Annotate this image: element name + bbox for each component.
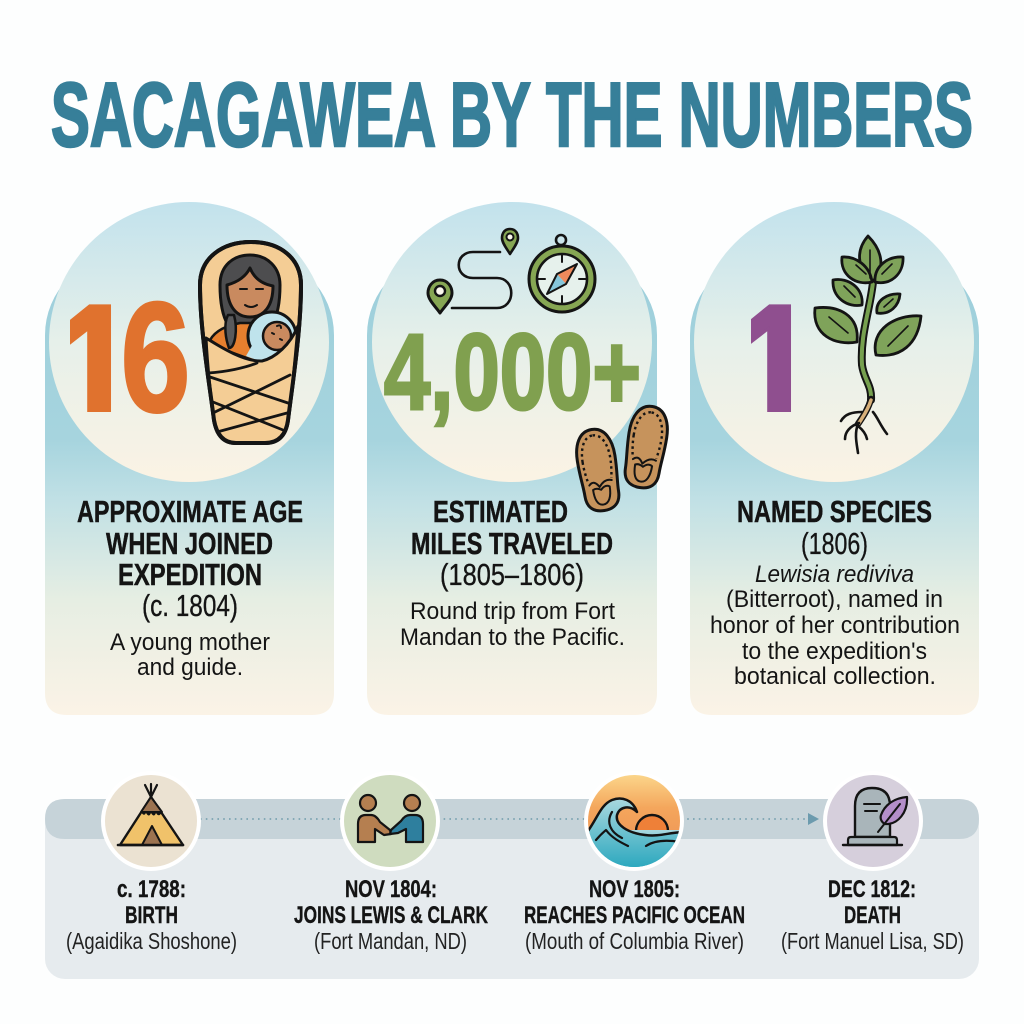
icon: compass: [529, 235, 595, 312]
text: joins Lewis and Clark: [294, 876, 488, 954]
stat number: 16: [70, 300, 187, 414]
description: bitterroot: [710, 561, 960, 690]
icon: bitterroot plant: [815, 236, 921, 453]
stat number: 16: 1: [52, 264, 139, 482]
milestone: reaches Pacific: [524, 771, 745, 954]
text: reaches Pacific: [524, 876, 745, 954]
heading: miles traveled: (1805–1806): [440, 557, 584, 592]
text: reaches Pacific: REACHES PACIFIC OCEAN: [524, 902, 745, 929]
timeline background: [45, 799, 979, 979]
panel: age card: [45, 202, 334, 715]
milestone: death: [781, 771, 964, 954]
milestone: joins Lewis and Clark: [294, 771, 488, 954]
description: young mother: and guide.: [137, 654, 243, 681]
panel: timeline: [45, 771, 979, 979]
description: bitterroot: honor of her contribution: [710, 612, 960, 639]
panel: miles card: [367, 202, 671, 715]
description: bitterroot: botanical collection.: [734, 663, 936, 690]
heading: miles traveled: [411, 494, 613, 592]
text: birth: c. 1788:: [117, 876, 186, 903]
stat circle: [372, 202, 652, 482]
card background: [367, 255, 657, 715]
text: death: DEATH: [844, 902, 901, 929]
heading: named species: NAMED SPECIES: [737, 494, 932, 529]
description: bitterroot: to the expedition's: [742, 638, 927, 665]
icon: tipi: [101, 771, 201, 871]
heading: approximate age: [77, 494, 303, 623]
heading: approximate age: WHEN JOINED: [106, 526, 273, 561]
description: bitterroot: Lewisia rediviva: [755, 561, 914, 588]
text: birth: (Agaidika Shoshone): [66, 928, 237, 954]
stat circle: [49, 202, 329, 482]
description: round trip: Round trip from Fort: [410, 598, 615, 625]
description: round trip: [400, 598, 625, 651]
heading: approximate age: APPROXIMATE AGE: [77, 494, 303, 529]
heading: approximate age: (c. 1804): [142, 588, 238, 623]
text: joins Lewis and Clark: JOINS LEWIS & CLARK: [294, 902, 488, 929]
icon: ocean wave and sunset: [584, 771, 685, 875]
text: joins Lewis and Clark: (Fort Mandan, ND): [314, 928, 467, 954]
text: birth: [66, 876, 237, 954]
stat circle: [694, 202, 974, 482]
heading: miles traveled: MILES TRAVELED: [411, 526, 613, 561]
timeline dotted arrow: [200, 813, 819, 825]
heading: named species: (1806): [801, 526, 868, 561]
timeline band: [45, 799, 979, 839]
description: round trip: Mandan to the Pacific.: [400, 624, 625, 651]
text: death: (Fort Manuel Lisa, SD): [781, 928, 964, 954]
description: bitterroot: (Bitterroot), named in: [726, 586, 943, 613]
heading: miles traveled: ESTIMATED: [433, 494, 568, 529]
text: death: [781, 876, 964, 954]
icon: mother and baby in cradleboard: [200, 242, 301, 443]
text: reaches Pacific: (Mouth of Columbia River): [525, 928, 744, 954]
text: joins Lewis and Clark: NOV 1804:: [345, 876, 437, 903]
icon: gravestone and feather: [823, 771, 923, 871]
stat number: 1: 1: [732, 264, 819, 482]
icon: moccasins: [573, 404, 671, 513]
heading: approximate age: EXPEDITION: [118, 557, 262, 592]
text: reaches Pacific: NOV 1805:: [589, 876, 680, 903]
description: young mother: [110, 629, 270, 681]
card background: [45, 255, 334, 715]
stat number: 4,000+: 4,000+: [384, 311, 641, 432]
panel: species card: [690, 202, 979, 715]
milestone: birth: [66, 771, 237, 954]
icon: handshake: [340, 771, 440, 871]
card background: [690, 255, 979, 715]
icon: route with map pins: [428, 229, 518, 313]
stat number: 16: 6: [121, 270, 190, 444]
text: birth: BIRTH: [125, 902, 178, 929]
heading: named species: [737, 494, 932, 561]
description: young mother: A young mother: [110, 629, 270, 656]
text: death: DEC 1812:: [828, 876, 916, 903]
